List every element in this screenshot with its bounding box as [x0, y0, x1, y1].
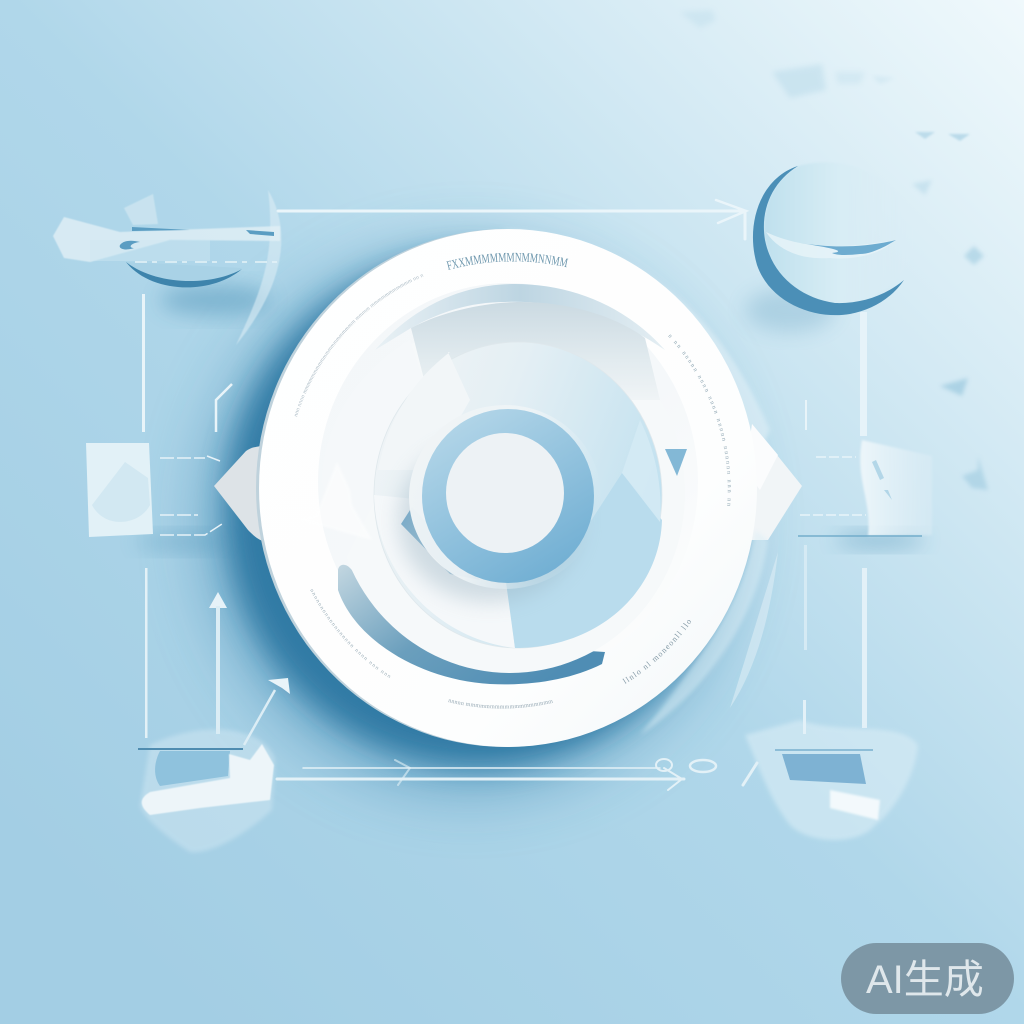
card: [860, 440, 932, 536]
left inner arrow upper: [216, 384, 232, 432]
dashes: [160, 456, 222, 535]
top connector arrow: [278, 200, 746, 239]
bottom connector: [277, 759, 757, 790]
left square node: [86, 443, 222, 537]
lower right rim glow: [640, 530, 768, 735]
inner recess: [318, 283, 698, 681]
badge text: AI生成: [866, 958, 984, 1002]
halo: [140, 729, 275, 852]
badge pill: [841, 943, 1014, 1014]
scattered particles: [680, 10, 988, 490]
card inner shape: [92, 462, 150, 522]
top shading band: [375, 284, 665, 350]
top right moon node: [753, 162, 918, 315]
right frame line upper: [860, 312, 867, 436]
moon face: [764, 162, 918, 304]
base line: [775, 749, 873, 751]
arrow shaft: [244, 690, 275, 745]
disk shadow: [135, 250, 925, 790]
lens arc: [126, 262, 242, 287]
left jagged highlight: [300, 462, 372, 540]
right frame line lower: [862, 568, 867, 728]
heading text on rim: FXXMMMMMMNMMNNMM: [446, 252, 568, 270]
top fin: [124, 194, 158, 225]
outer rim: [259, 229, 757, 747]
blue streaks: [120, 227, 274, 249]
pale right sector: [622, 420, 661, 522]
center circle: [446, 433, 564, 553]
lower band: [90, 240, 210, 261]
left blue triangle: [401, 507, 480, 580]
left inner arrow lower: [209, 592, 227, 734]
mid plate: [374, 342, 662, 648]
right blue triangle: [665, 449, 687, 476]
halo: [745, 720, 918, 840]
rim label lower right: llnlo nl moneonll llo: [622, 620, 691, 684]
right square node: [798, 440, 932, 537]
lower crescent: [338, 565, 605, 684]
moon water band: [766, 232, 895, 258]
left soft panel: [322, 340, 428, 560]
bottom right node: [745, 700, 918, 840]
rim label lower left: nnnnnnnnnnnnnnnnnn nnnn nnn nnn: [310, 589, 390, 678]
white body: [142, 744, 274, 815]
window: [782, 754, 866, 784]
faint swoosh lower right: [730, 552, 778, 708]
disk edge: [256, 229, 754, 747]
arrow star: [268, 678, 290, 694]
lower left sector: [374, 495, 515, 648]
card: [86, 443, 153, 537]
stem: [803, 700, 806, 734]
rim label right: n nn nnnnn nnnn nnnn nnnnn nnnnnn nnn nn: [668, 334, 731, 506]
rim label bottom: nnnnn mmmmmmmmmmmmmmmmmm: [448, 699, 553, 708]
center plate: [409, 405, 601, 589]
left pointer tab: [214, 446, 266, 542]
window: [155, 751, 230, 786]
dashes: [135, 261, 280, 263]
right pointer tab: [745, 424, 802, 540]
upper left panel: [378, 352, 470, 470]
main disk: [256, 229, 757, 747]
base line: [798, 535, 922, 537]
white body: [830, 790, 880, 820]
lower white band: [335, 313, 685, 673]
glass band: [53, 217, 280, 262]
bottom left node: [138, 678, 290, 852]
center plate shadow: [398, 438, 582, 602]
moon streak: [800, 240, 896, 255]
dashes: [800, 457, 866, 515]
blue ring: [422, 409, 594, 583]
faint halo behind disk: [500, 228, 770, 480]
lens body: [126, 262, 242, 287]
card specks: [872, 460, 892, 500]
rim label upper left: nnn nnnn mmmmmmmmmmmmmmmmmmmm mmmm mmmmmmmmmmm nn n: [294, 274, 424, 416]
right inner line lower: [804, 545, 807, 650]
left frame line upper: [142, 294, 145, 432]
base line: [138, 748, 243, 750]
moon crescent: [753, 166, 904, 315]
swoosh: [236, 190, 281, 345]
lower right sector: [505, 473, 662, 648]
upper wedge: [411, 302, 660, 400]
right inner line upper: [805, 400, 807, 430]
AI badge: [841, 943, 1014, 1014]
left frame line lower: [145, 568, 148, 738]
top left node: [53, 190, 281, 345]
